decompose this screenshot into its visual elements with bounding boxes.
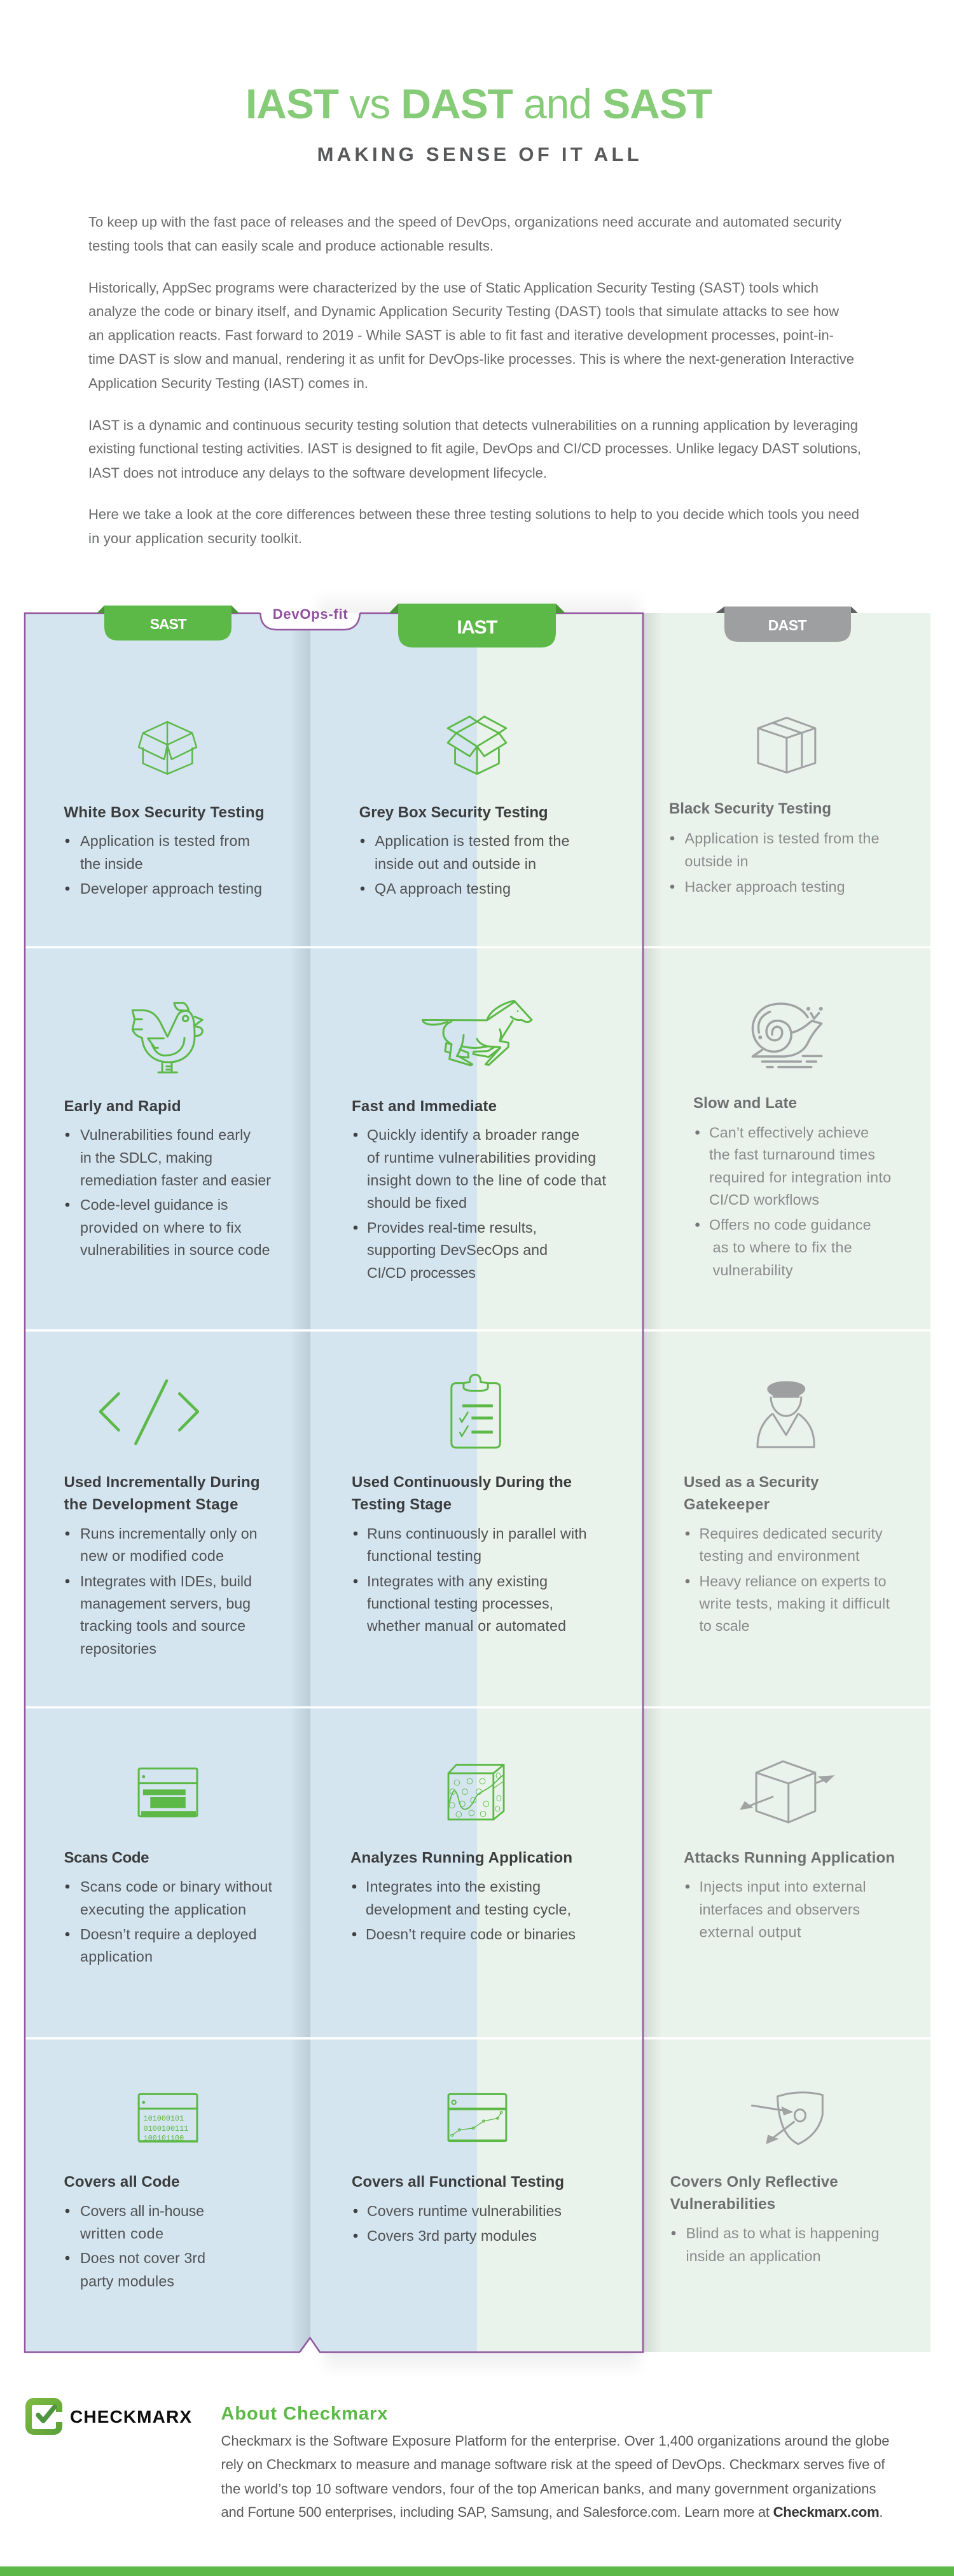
bullet list: [66, 1126, 271, 1258]
bullet list: Hacker approach testing: [684, 878, 845, 895]
intro text: an application reacts. Fast forward to 2019 - While SAST is able to fit fast and iterative development processes, point-in-: [88, 327, 834, 343]
bullet list: Runs continuously in parallel with: [367, 1525, 586, 1542]
heading: [64, 1474, 259, 1513]
subtitle: MAKING SENSE OF IT ALL: [317, 143, 639, 165]
icon: clipboard checklist: [452, 1375, 500, 1448]
bullet list: the inside: [80, 855, 143, 872]
bullet list: [686, 1525, 890, 1634]
tab: IAST: IAST: [457, 617, 497, 638]
bullet list: application: [80, 1948, 153, 1965]
bullet list: [670, 830, 879, 895]
about text: [221, 2433, 889, 2520]
bullet list: CI/CD processes: [367, 1264, 476, 1281]
icon: rooster: [132, 1003, 202, 1072]
bullet list: Runs incrementally only on: [80, 1525, 257, 1542]
bullet list: Application is tested from: [80, 833, 250, 849]
bullet list: Application is tested from the: [375, 833, 570, 849]
bullet list: [354, 2203, 562, 2244]
heading: Slow and Late: [693, 1095, 797, 1112]
icon: cube with arrows: [740, 1761, 834, 1822]
bullet list: insight down to the line of code that: [367, 1172, 607, 1188]
card: black box testing: [669, 717, 879, 895]
bullet list: should be fixed: [367, 1195, 467, 1211]
DevOps-fit tab: [261, 606, 360, 630]
heading: Used Continuously During the: [352, 1474, 572, 1491]
heading: Covers all Functional Testing: [352, 2173, 564, 2191]
about text: rely on Checkmarx to measure and manage software risk at the speed of DevOps. Checkmarx serves five of: [221, 2456, 885, 2472]
icon: guard: [757, 1381, 814, 1447]
tab: DAST: DAST: [768, 617, 807, 634]
bullet list: [66, 833, 262, 897]
bullet list: Injects input into external: [700, 1878, 866, 1895]
about text: Checkmarx is the Software Exposure Platform for the enterprise. Over 1,400 organizations around the globe: [221, 2433, 889, 2449]
bullet list: [66, 1525, 257, 1657]
icon: binary window: 100101100: [144, 2134, 184, 2143]
intro text: time DAST is slow and manual, rendering it as unfit for DevOps-like processes. This is where the next-generation Interactive: [88, 351, 854, 367]
card: early and rapid: [64, 1003, 271, 1258]
panel: SAST column: [25, 613, 310, 2352]
heading: [670, 2173, 838, 2213]
bullet list: Code-level guidance is: [80, 1196, 228, 1213]
bullet list: Does not cover 3rd: [80, 2250, 205, 2266]
intro text: To keep up with the fast pace of releases and the speed of DevOps, organizations need accurate and automated security: [88, 214, 841, 230]
panel: IAST column: [310, 613, 643, 2352]
bullet list: to scale: [700, 1617, 749, 1634]
bullet list: Doesn’t require code or binaries: [366, 1926, 576, 1942]
bullet list: Quickly identify a broader range: [367, 1126, 579, 1143]
bullet list: Application is tested from the: [684, 830, 879, 847]
tab: SAST: SAST: [150, 616, 187, 632]
heading: Fast and Immediate: [352, 1098, 497, 1115]
intro text: IAST is a dynamic and continuous security testing solution that detects vulnerabilities on a running application by leveraging: [88, 417, 858, 433]
icon: open grey box: [448, 717, 506, 774]
bullet list: of runtime vulnerabilities providing: [367, 1149, 596, 1166]
heading: Scans Code: [64, 1850, 149, 1866]
bullet list: [361, 833, 570, 897]
icon: binary window: [139, 2094, 198, 2143]
bullet list: [686, 1878, 866, 1940]
bullet list: new or modified code: [80, 1548, 224, 1564]
logo wordmark: CHECKMARX: [70, 2407, 191, 2427]
intro text: [88, 214, 861, 546]
bullet list: party modules: [80, 2273, 174, 2290]
bullet list: Scans code or binary without: [80, 1878, 273, 1895]
bullet list: functional testing: [367, 1548, 481, 1564]
card: covers all code: [64, 2094, 205, 2290]
bullet list: Provides real-time results,: [367, 1219, 537, 1236]
heading: Covers Only Reflective: [670, 2173, 838, 2191]
heading: the Development Stage: [64, 1496, 238, 1513]
heading: Testing Stage: [352, 1496, 452, 1513]
heading: [684, 1474, 819, 1513]
bullet list: whether manual or automated: [366, 1617, 566, 1634]
about text: and Fortune 500 enterprises, including SAP, Samsung, and Salesforce.com. Learn more at Checkmarx.com.: [221, 2504, 883, 2520]
card: slow and late: [693, 1004, 891, 1278]
icon: closed box: [758, 717, 815, 773]
heading: Attacks Running Application: [684, 1850, 895, 1866]
heading: Used as a Security: [684, 1474, 819, 1491]
card: grey box testing: [359, 717, 570, 897]
bullet list: Can’t effectively achieve: [709, 1125, 869, 1141]
bullet list: Vulnerabilities found early: [80, 1126, 251, 1143]
about heading: About Checkmarx: [221, 2404, 387, 2424]
bullet list: interfaces and observers: [700, 1901, 860, 1918]
icon: logo mark: [25, 2398, 63, 2435]
card: covers all functional testing: [352, 2094, 564, 2244]
icon: binary window: 101000101: [144, 2114, 184, 2123]
bullet list: Covers 3rd party modules: [367, 2227, 537, 2244]
tab: IAST: [389, 604, 565, 647]
bullet list: Heavy reliance on experts to: [700, 1573, 887, 1589]
bullet list: vulnerabilities in source code: [80, 1242, 270, 1258]
icon: data cube: [448, 1765, 504, 1820]
bullet list: [352, 1878, 576, 1942]
bullet list: tracking tools and source: [80, 1617, 245, 1634]
bullet list: Doesn’t require a deployed: [80, 1926, 257, 1942]
heading: White Box Security Testing: [64, 804, 265, 821]
intro text: in your application security toolkit.: [88, 530, 302, 546]
card: scans code: [64, 1768, 273, 1965]
bullet list: QA approach testing: [375, 880, 511, 897]
bullet list: inside out and outside in: [375, 855, 536, 872]
bullet list: Integrates with any existing: [367, 1573, 548, 1589]
icon: code window: [139, 1768, 197, 1817]
bullet list: development and testing cycle,: [366, 1901, 571, 1918]
bullet list: written code: [80, 2225, 163, 2241]
card: analyzes running application: [350, 1765, 576, 1942]
heading: Grey Box Security Testing: [359, 804, 548, 821]
bullet list: write tests, making it difficult: [698, 1595, 890, 1612]
bullet list: management servers, bug: [80, 1595, 251, 1612]
icon: open white box: [139, 722, 197, 774]
icon: binary window: 0100100111: [144, 2124, 188, 2133]
bullet list: required for integration into: [709, 1169, 891, 1186]
card: white box testing: [64, 722, 265, 897]
tab: SAST: [97, 606, 239, 641]
bullet list: Covers all in-house: [80, 2203, 204, 2219]
bullet list: vulnerability: [713, 1262, 793, 1278]
bullet list: repositories: [80, 1640, 156, 1657]
bottom shadow below IAST: [324, 2352, 639, 2378]
bullet list: Requires dedicated security: [700, 1525, 883, 1542]
bullet list: Developer approach testing: [80, 880, 262, 897]
bullet list: Offers no code guidance: [709, 1217, 871, 1233]
intro text: IAST does not introduce any delays to the software development lifecycle.: [88, 465, 547, 481]
bullet list: in the SDLC, making: [80, 1149, 212, 1166]
intro text: Historically, AppSec programs were characterized by the use of Static Application Security Testing (SAST) tools which: [88, 280, 819, 296]
bullet list: Integrates into the existing: [366, 1878, 541, 1895]
heading: Black Security Testing: [669, 800, 831, 817]
bullet list: [695, 1125, 891, 1278]
heading: Gatekeeper: [684, 1496, 770, 1513]
icon: chart window: [448, 2094, 506, 2141]
bullet list: as to where to fix the: [713, 1239, 852, 1256]
bullet list: Integrates with IDEs, build: [80, 1573, 252, 1589]
bullet list: [672, 2225, 879, 2264]
card: used continuously: [352, 1375, 586, 1634]
about text: the world’s top 10 software vendors, four of the top American banks, and many government organizations: [221, 2481, 876, 2497]
bullet list: [354, 1525, 586, 1634]
bullet list: inside an application: [686, 2248, 820, 2264]
card: attacks running application: [684, 1761, 895, 1940]
panel: DAST column: [643, 613, 930, 2352]
bullet list: [354, 1126, 607, 1281]
bullet list: executing the application: [80, 1901, 246, 1918]
bullet list: provided on where to fix: [80, 1219, 242, 1236]
bottom notch fill: [301, 2339, 319, 2353]
icon: snail: [752, 1004, 822, 1067]
intro text: analyze the code or binary itself, and Dynamic Application Security Testing (DAST) tools that simulate attacks to see how: [88, 303, 839, 319]
Checkmarx logo: [25, 2398, 191, 2435]
icon: running horse: [422, 1001, 532, 1065]
intro text: Here we take a look at the core differences between these three testing solutions to help to you decide which tools you need: [88, 506, 859, 522]
bullet list: CI/CD workflows: [709, 1191, 819, 1208]
bullet list: outside in: [684, 853, 748, 869]
bullet list: functional testing processes,: [367, 1595, 553, 1612]
bullet list: remediation faster and easier: [80, 1172, 271, 1188]
bullet list: [66, 2203, 205, 2290]
bullet list: the fast turnaround times: [709, 1146, 875, 1163]
intro text: Application Security Testing (IAST) comes in.: [88, 375, 368, 391]
heading: [352, 1474, 572, 1513]
heading: Analyzes Running Application: [350, 1850, 572, 1866]
bullet list: Covers runtime vulnerabilities: [367, 2203, 562, 2219]
bullet list: Blind as to what is happening: [686, 2225, 879, 2241]
intro text: testing tools that can easily scale and produce actionable results.: [88, 238, 494, 254]
DevOps-fit frame: [25, 613, 643, 2352]
bullet list: testing and environment: [700, 1548, 860, 1564]
card: fast and immediate: [352, 1001, 607, 1281]
card: reflective vulnerabilities: [670, 2093, 879, 2264]
top shadow above IAST: [318, 588, 639, 613]
bullet list: supporting DevSecOps and: [367, 1242, 548, 1258]
icon: code brackets: [100, 1381, 198, 1444]
intro text: existing functional testing activities. IAST is designed to fit agile, DevOps and CI/CD processes. Unlike legacy DAST solutions,: [88, 440, 861, 457]
bullet list: [66, 1878, 273, 1965]
heading: Used Incrementally During: [64, 1474, 259, 1491]
card: security gatekeeper: [684, 1381, 890, 1634]
heading: Early and Rapid: [64, 1098, 181, 1115]
heading: Vulnerabilities: [670, 2196, 775, 2213]
footer bar: [0, 2566, 954, 2576]
card: used incrementally: [64, 1381, 259, 1657]
heading: Covers all Code: [64, 2173, 179, 2191]
title: IAST vs DAST and SAST: [245, 80, 712, 127]
DevOps-fit tab: DevOps-fit: [273, 606, 348, 622]
icon: shield with arrows: [752, 2093, 822, 2144]
bullet list: external output: [700, 1923, 801, 1940]
tab: DAST: [716, 607, 858, 642]
